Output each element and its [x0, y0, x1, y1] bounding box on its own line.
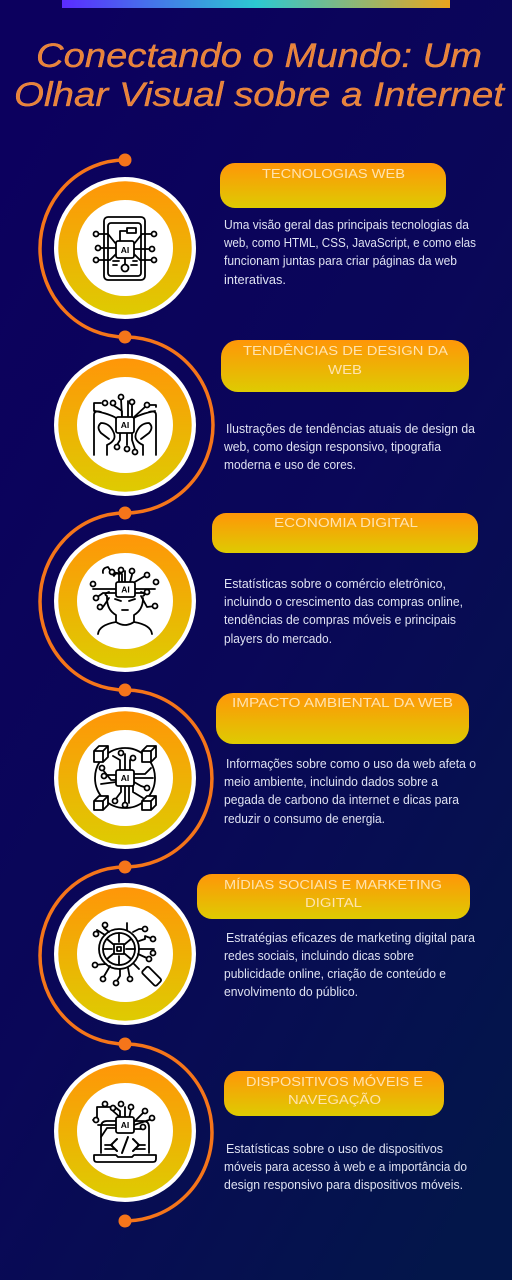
- pill heading: [212, 513, 478, 553]
- title: Olhar Visual sobre a Internet: [14, 76, 506, 114]
- description: [224, 576, 463, 646]
- description: redes sociais, incluindo dicas sobre: [224, 948, 414, 963]
- description: web, como design responsivo, tipografia: [223, 439, 442, 454]
- description: meio ambiente, incluindo dados sobre a: [224, 774, 439, 789]
- panel: midias sociais: [197, 874, 476, 999]
- pill heading: TENDÊNCIAS DE DESIGN DA: [243, 343, 448, 358]
- pill heading: [220, 163, 446, 208]
- pill heading: [197, 874, 470, 919]
- description: [224, 930, 476, 999]
- description: [224, 1141, 467, 1192]
- description: pegada de carbono da internet e dicas para: [224, 792, 460, 807]
- description: web, como HTML, CSS, JavaScript, e como elas: [223, 235, 476, 250]
- pill heading: DIGITAL: [305, 895, 362, 910]
- title: Conectando o Mundo: Um: [36, 37, 482, 75]
- description: design responsivo para dispositivos móveis.: [224, 1177, 463, 1192]
- description: Estatísticas sobre o uso de dispositivos: [226, 1141, 443, 1156]
- pill heading: NAVEGAÇÃO: [288, 1092, 381, 1107]
- top gradient bar: [62, 0, 450, 8]
- icon badge 5: AI magnifier: [54, 883, 196, 1025]
- description: interativas.: [224, 272, 286, 287]
- pill heading: DISPOSITIVOS MÓVEIS E: [246, 1074, 423, 1089]
- description: envolvimento do público.: [224, 984, 358, 999]
- description: reduzir o consumo de energia.: [224, 811, 385, 826]
- description: incluindo o crescimento das compras online,: [224, 594, 463, 609]
- icon badge 4: AI globe with cubes: AI: [121, 773, 129, 783]
- description: Estratégias eficazes de marketing digital para: [226, 930, 476, 945]
- panel: impacto ambiental: [216, 693, 476, 826]
- panel: dispositivos moveis: [224, 1071, 467, 1192]
- icon badge 3: AI head: [54, 530, 196, 672]
- pill heading: ECONOMIA DIGITAL: [274, 515, 418, 530]
- pill heading: TECNOLOGIAS WEB: [262, 166, 405, 181]
- description: tendências de compras móveis e principais: [224, 612, 456, 627]
- pill heading: MÍDIAS SOCIAIS E MARKETING: [224, 877, 442, 892]
- icon badge 6: AI laptop: [54, 1060, 196, 1202]
- panel: tendencias de design: [221, 340, 476, 472]
- icon badge 2: AI hands: AI: [121, 420, 129, 430]
- panel: tecnologias web: [220, 163, 476, 287]
- description: Uma visão geral das principais tecnologias da: [224, 217, 470, 232]
- icon badge 3: AI head: AI: [121, 584, 130, 594]
- description: publicidade online, criação de conteúdo e: [224, 966, 446, 981]
- panel: economia digital: [212, 513, 478, 646]
- pill heading: WEB: [328, 362, 362, 377]
- icon badge 1: AI phone: AI: [121, 245, 129, 255]
- description: Estatísticas sobre o comércio eletrônico,: [224, 576, 446, 591]
- pill heading: [221, 340, 469, 392]
- description: móveis para acesso à web e a importância do: [224, 1159, 467, 1174]
- description: Informações sobre como o uso da web afeta o: [226, 756, 476, 771]
- description: [223, 421, 476, 472]
- icon badge 1: AI phone: [54, 177, 196, 319]
- pill heading: [216, 693, 469, 744]
- pill heading: [224, 1071, 444, 1116]
- timeline connector: [40, 154, 213, 1228]
- title: [14, 37, 506, 114]
- description: Ilustrações de tendências atuais de design da: [226, 421, 476, 436]
- description: [224, 756, 476, 826]
- icon badge 6: AI laptop: AI: [121, 1120, 129, 1130]
- description: moderna e uso de cores.: [224, 457, 356, 472]
- icon badge 4: AI globe with cubes: [54, 707, 196, 849]
- icon badge 2: AI hands: [54, 354, 196, 496]
- description: players do mercado.: [224, 631, 332, 646]
- description: funcionam juntas para criar páginas da web: [224, 253, 457, 268]
- pill heading: IMPACTO AMBIENTAL DA WEB: [232, 695, 453, 710]
- description: [223, 217, 476, 287]
